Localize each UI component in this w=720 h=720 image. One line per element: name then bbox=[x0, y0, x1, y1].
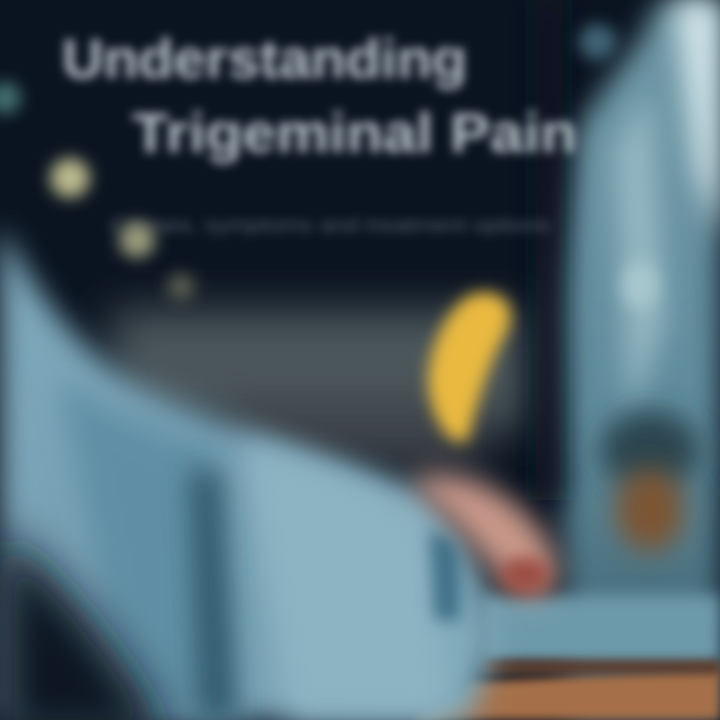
panel: right curtain bbox=[535, 0, 720, 720]
panel: table bbox=[410, 595, 720, 720]
chalkboard haze bbox=[110, 310, 530, 470]
heading: title: Trigeminal Pain bbox=[132, 101, 577, 164]
heading: title: Understanding bbox=[62, 27, 467, 90]
panel: sleeve bbox=[0, 225, 496, 720]
subtitle text: Causes, symptoms and treatment options bbox=[110, 215, 550, 237]
icon: yellow exclamation shape bbox=[428, 292, 511, 442]
icon: hand bbox=[415, 475, 556, 600]
icon: glowing dots bbox=[0, 82, 195, 301]
heading: title bbox=[62, 27, 577, 164]
icon: brown object bbox=[616, 468, 684, 552]
